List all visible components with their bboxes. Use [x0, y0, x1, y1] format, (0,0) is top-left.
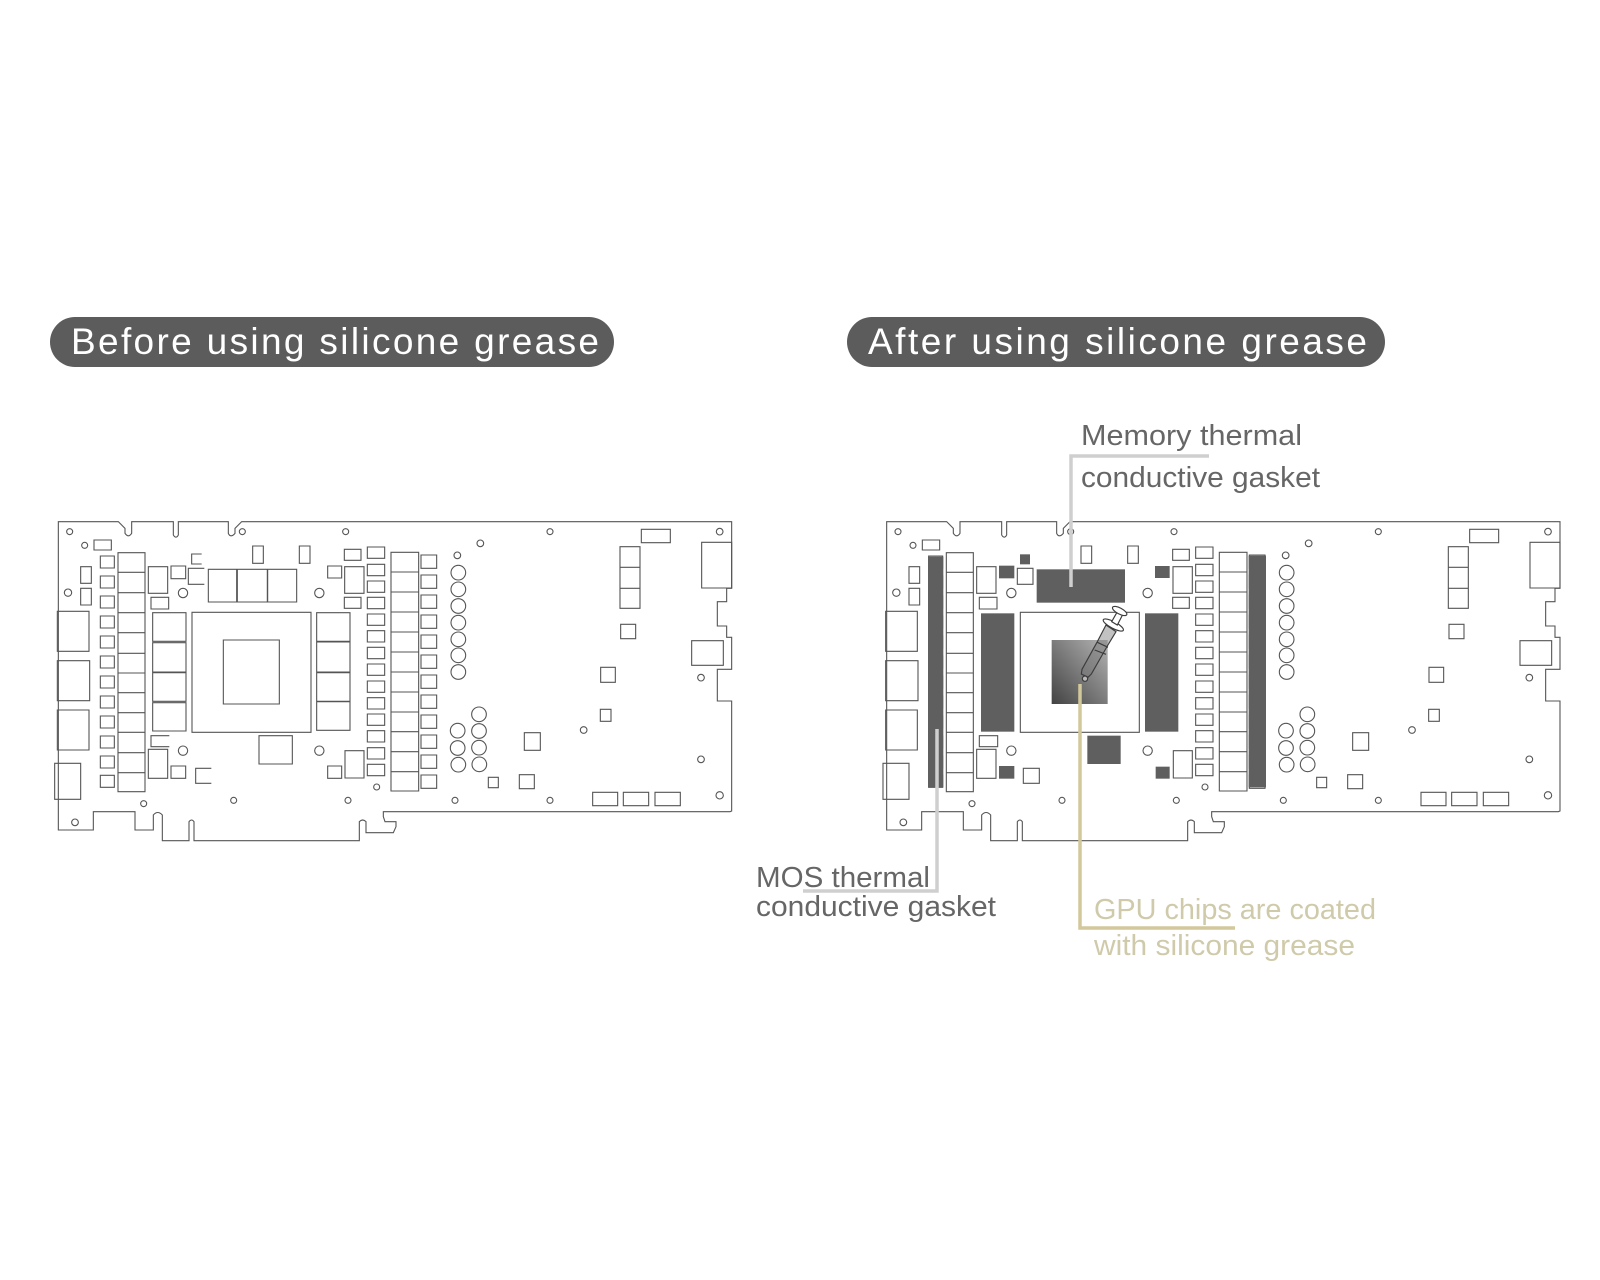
- outlined components on the treated board: [979, 568, 1039, 783]
- callout: GPU chips are coated with silicone grease: GPU chips are coated: [1094, 894, 1376, 926]
- thermal gaskets and grease on the treated board: [928, 554, 1266, 787]
- callout: MOS thermal conductive gasket: conductive gasket: [756, 891, 996, 923]
- GPU chip coated with grease: [1052, 640, 1108, 704]
- diagram: circuit board before silicone grease: [55, 522, 732, 841]
- callout: GPU chips are coated with silicone grease: [1080, 684, 1376, 962]
- callout: memory thermal conductive gasket: Memory thermal: [1081, 420, 1302, 452]
- memory chips and GPU outlines: [151, 554, 350, 783]
- callout: memory thermal conductive gasket: [1071, 420, 1320, 587]
- diagram: circuit board after silicone grease: [883, 522, 1560, 841]
- icon: grease syringe: [1081, 605, 1128, 681]
- MOS thermal gasket bars: [928, 556, 1266, 787]
- callout: memory thermal conductive gasket: conductive gasket: [1081, 462, 1320, 494]
- heading pill: before using silicone grease: Before using silicone grease: [71, 321, 599, 362]
- callout: GPU chips are coated with silicone grease: with silicone grease: [1093, 930, 1355, 962]
- memory thermal gasket pads: [981, 554, 1178, 779]
- callout: MOS thermal conductive gasket: [756, 729, 996, 923]
- callout: MOS thermal conductive gasket: MOS thermal: [756, 862, 930, 894]
- heading pill: after using silicone grease: After using silicone grease: [868, 321, 1367, 362]
